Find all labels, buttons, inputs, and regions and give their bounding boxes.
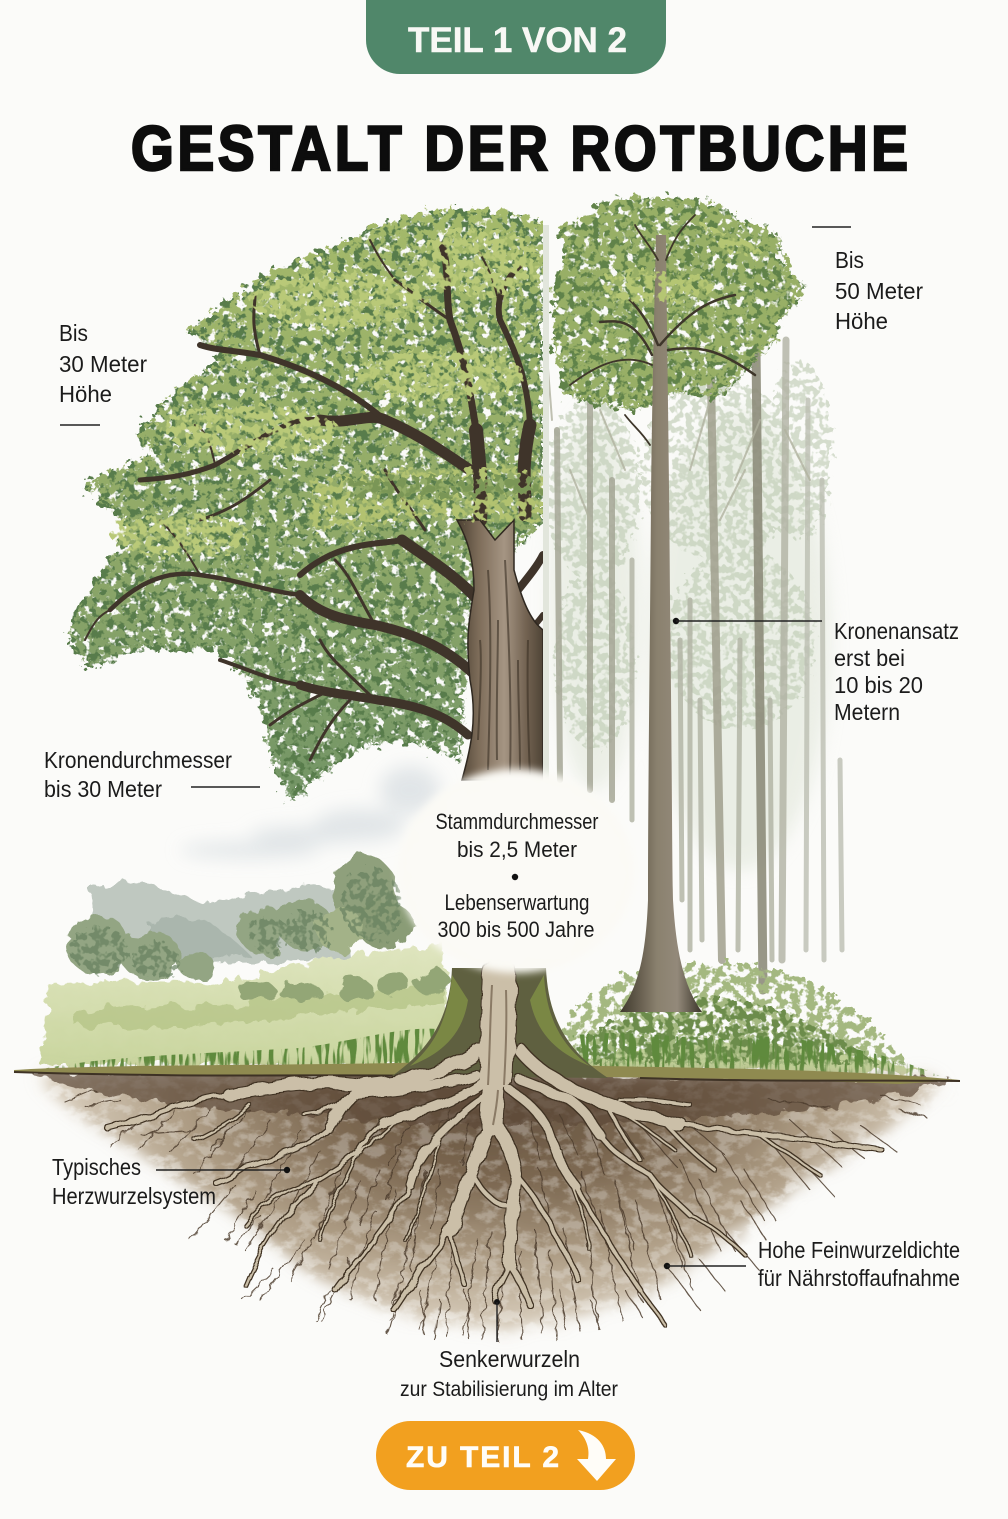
fine rootlets — [65, 1090, 925, 1340]
label: 50 meter height: 50 Meter — [835, 278, 923, 304]
soil mottled layer — [40, 1078, 940, 1326]
sky clouds — [180, 766, 440, 858]
title: GESTALT DER ROTBUCHE — [131, 115, 908, 184]
branches — [85, 240, 543, 760]
soft ground under the forest — [552, 1044, 930, 1072]
bark furrows — [478, 560, 530, 775]
illustration: broad open-grown beech — [71, 210, 543, 800]
main roots — [108, 975, 881, 1325]
shadow foliage inside band — [350, 476, 540, 500]
label: fine root density — [664, 1237, 960, 1291]
label: trunk diameter and life expectancy — [436, 809, 598, 942]
label: heart root system: Herzwurzelsystem — [52, 1183, 216, 1209]
label: fine root density: Hohe Feinwurzeldichte — [758, 1237, 960, 1263]
yellow-green foliage band over forks — [310, 468, 543, 530]
meadow bushes — [235, 968, 450, 1002]
label: trunk diameter and life expectancy: 300 bis 500 Jahre — [438, 917, 594, 942]
label: sinker roots — [400, 1299, 618, 1401]
darker shrub accents — [570, 998, 880, 1065]
label: trunk diameter and life expectancy: bis 2,5 Meter — [457, 837, 577, 862]
meadow shading — [75, 985, 445, 1027]
label: sinker roots: Senkerwurzeln — [439, 1346, 580, 1372]
mist wash — [550, 410, 830, 870]
label: heart root system — [52, 1154, 290, 1209]
top badge — [366, 0, 666, 74]
label: crown base — [673, 618, 959, 725]
faint forest trunks — [545, 330, 842, 990]
label: crown diameter: bis 30 Meter — [44, 776, 162, 802]
slender trunk — [620, 235, 702, 1012]
crown shadow layer — [71, 210, 543, 800]
illustration: soil and roots — [14, 968, 960, 1340]
illustration: landscape behind the tree — [30, 766, 450, 1072]
next part button: ZU TEIL 2 — [406, 1441, 559, 1474]
label: trunk diameter and life expectancy: Lebenserwartung — [444, 890, 590, 915]
top badge: TEIL 1 VON 2 — [408, 21, 627, 60]
label: fine root density: für Nährstoffaufnahme — [758, 1265, 960, 1291]
label: crown base: erst bei — [834, 645, 905, 671]
label: 30 meter height: Bis — [59, 320, 88, 346]
crown dark — [552, 198, 805, 409]
tree shading — [72, 869, 402, 978]
illustration: pale centre split strip — [543, 225, 549, 780]
ground strip — [14, 1062, 960, 1084]
label: trunk diameter and life expectancy: Stammdurchmesser — [436, 809, 598, 834]
understory shrubs — [555, 964, 905, 1065]
crown mid layer — [71, 210, 543, 800]
label: sinker roots: zur Stabilisierung im Alter — [400, 1378, 618, 1401]
label: crown diameter — [44, 747, 260, 802]
moss on root flare — [410, 975, 590, 1066]
label: crown base: 10 bis 20 — [834, 672, 923, 698]
icon: curved arrow down — [577, 1430, 616, 1481]
hills — [90, 883, 350, 965]
label: 50 meter height: Bis — [835, 247, 864, 273]
label: 50 meter height: Höhe — [835, 308, 888, 334]
label: crown base: Metern — [834, 699, 900, 725]
crown highlight clusters — [110, 228, 540, 557]
distant trees — [66, 855, 413, 979]
label: 50 meter height — [812, 227, 923, 334]
circular text clearing — [398, 769, 634, 973]
soil body wash — [40, 1078, 940, 1326]
label: heart root system: Typisches — [52, 1154, 141, 1180]
grass blades — [30, 1029, 445, 1072]
label: crown base: Kronenansatz — [834, 618, 959, 644]
label: crown diameter: Kronendurchmesser — [44, 747, 232, 773]
illustration: faint forest on the right — [544, 330, 940, 1076]
ground line — [14, 1072, 960, 1081]
crown highlights — [600, 220, 765, 303]
massive trunk — [457, 520, 543, 780]
dark upper soil band — [30, 1073, 952, 1124]
next part button — [376, 1421, 635, 1490]
label: 30 meter height — [59, 320, 147, 425]
crown branches — [570, 215, 755, 445]
right grass blades — [550, 1033, 940, 1076]
faint foliage — [544, 360, 832, 750]
meadow — [40, 945, 450, 1065]
moss-covered trunk base — [392, 968, 608, 1078]
illustration: tall forest-grown beech — [552, 198, 805, 1012]
label: 30 meter height: Höhe — [59, 381, 112, 407]
bark streaks on taproot — [488, 985, 506, 1125]
crown mid — [552, 198, 805, 409]
label: 30 meter height: 30 Meter — [59, 351, 147, 377]
